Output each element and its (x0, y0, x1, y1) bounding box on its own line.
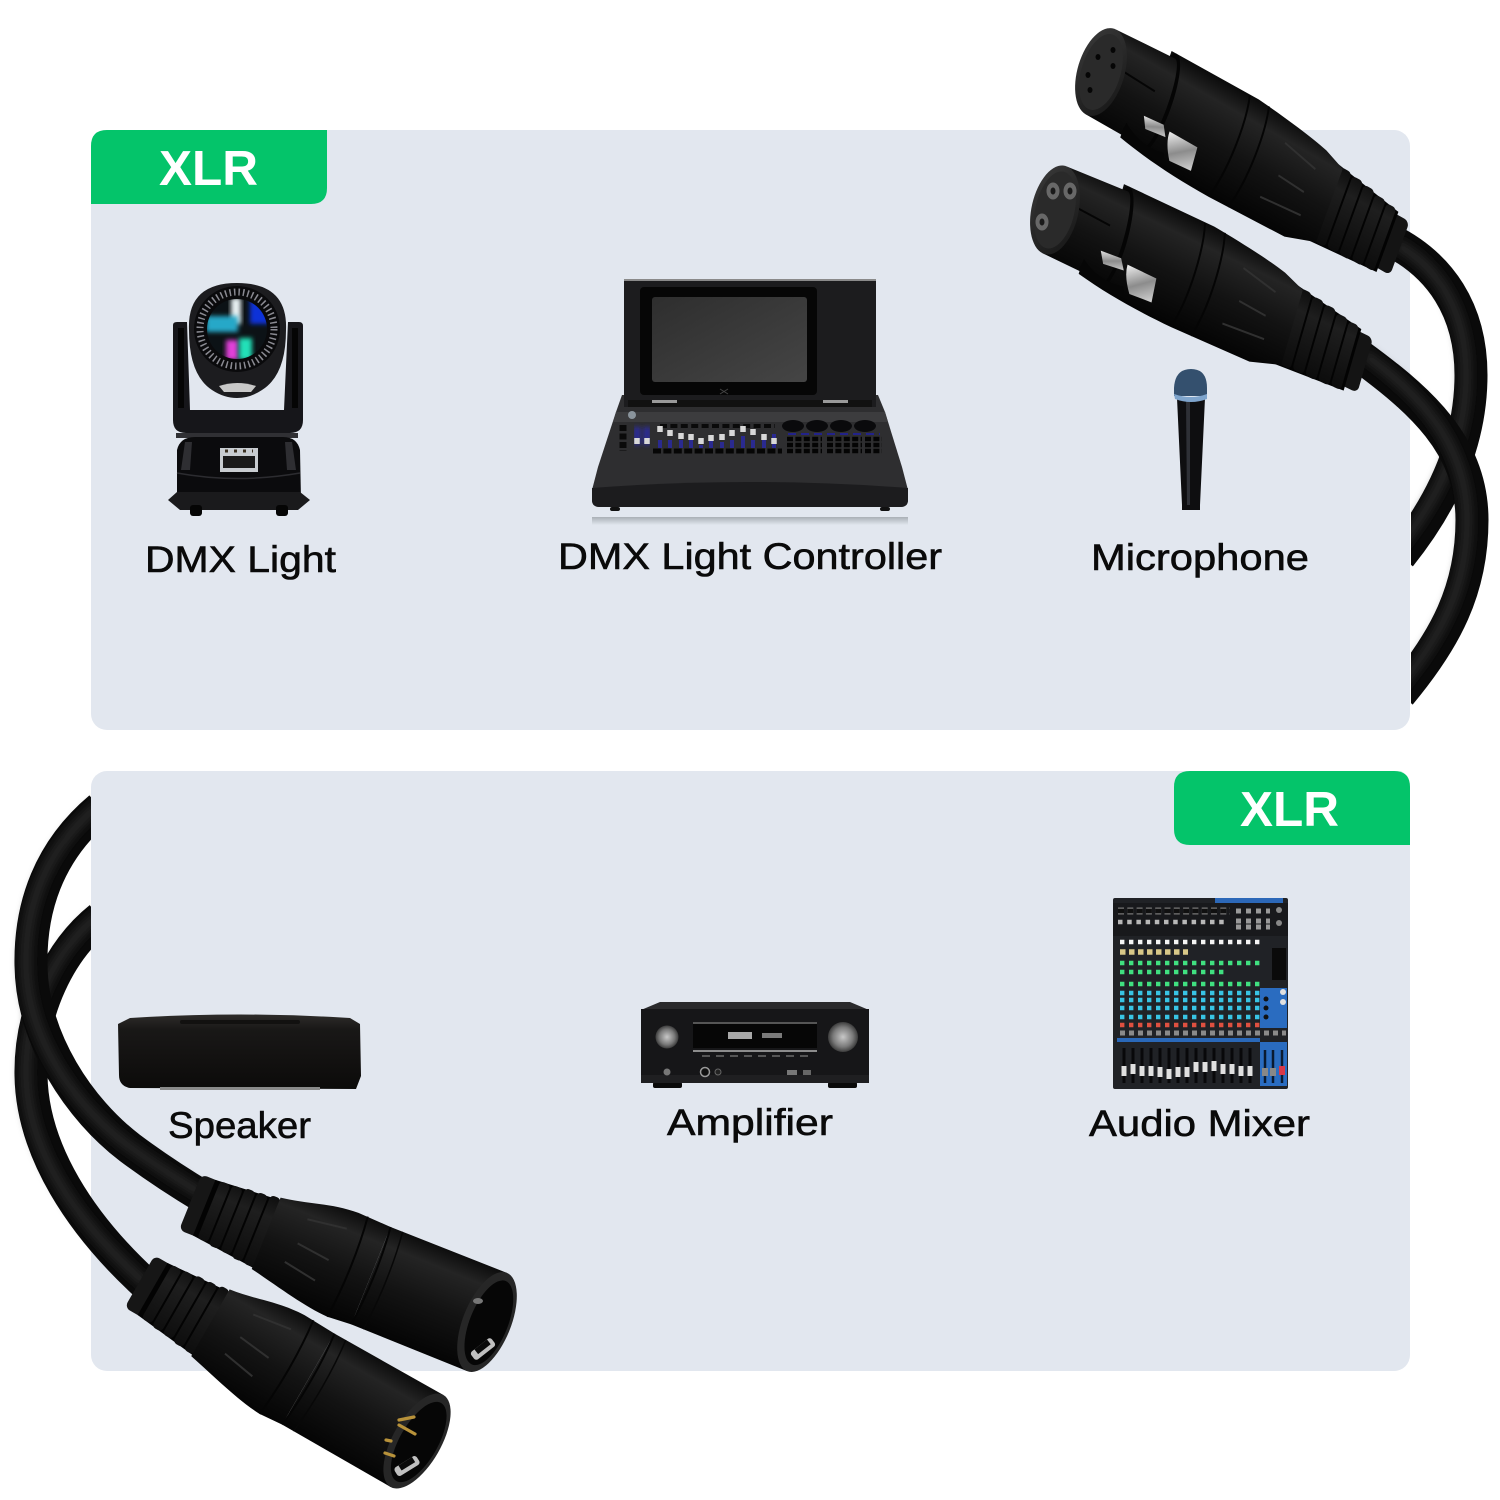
icon: DMX light controller (592, 279, 908, 525)
badge: XLR top: XLR (159, 142, 258, 196)
cable: bottom pair (26, 804, 205, 1288)
mixer inputs (1118, 907, 1282, 927)
icon: amplifier (641, 1002, 869, 1088)
text: Audio Mixer: Audio Mixer (1089, 1102, 1310, 1144)
gold pins (385, 1417, 415, 1456)
icon: speaker (118, 1014, 361, 1090)
socket holes (1086, 47, 1116, 93)
lens colours (206, 298, 270, 360)
connector: male XLR, upper (170, 1153, 529, 1382)
latch slot (470, 1337, 496, 1361)
connector: male XLR, lower (112, 1236, 464, 1500)
text: DMX Light Controller: DMX Light Controller (558, 535, 942, 577)
latch slot (393, 1455, 421, 1477)
connector: female XLR, 5-pin face (1061, 8, 1420, 296)
badge: XLR top (91, 130, 327, 204)
badge: XLR bottom (1174, 771, 1410, 845)
text: Microphone: Microphone (1091, 536, 1309, 578)
mixer faders (1124, 1048, 1285, 1083)
icon: audio mixer (1113, 898, 1288, 1089)
cable: top pair (1360, 240, 1472, 694)
panel: top applications (91, 130, 1410, 730)
text: DMX Light: DMX Light (145, 538, 337, 580)
mixer blue section (1260, 988, 1287, 1028)
text: Amplifier: Amplifier (667, 1101, 833, 1143)
panel: bottom applications (91, 771, 1410, 1371)
badge: XLR bottom: XLR (1240, 783, 1339, 837)
text: Speaker: Speaker (168, 1104, 311, 1146)
socket holes (1036, 182, 1076, 230)
icon: microphone (1174, 369, 1207, 510)
controller knobs and keys (782, 420, 882, 451)
mixer knob rows (1120, 942, 1286, 1033)
controller faders (623, 425, 782, 451)
connector: female XLR, 3-pin face (1018, 147, 1382, 414)
icon: DMX moving head light (168, 283, 310, 516)
